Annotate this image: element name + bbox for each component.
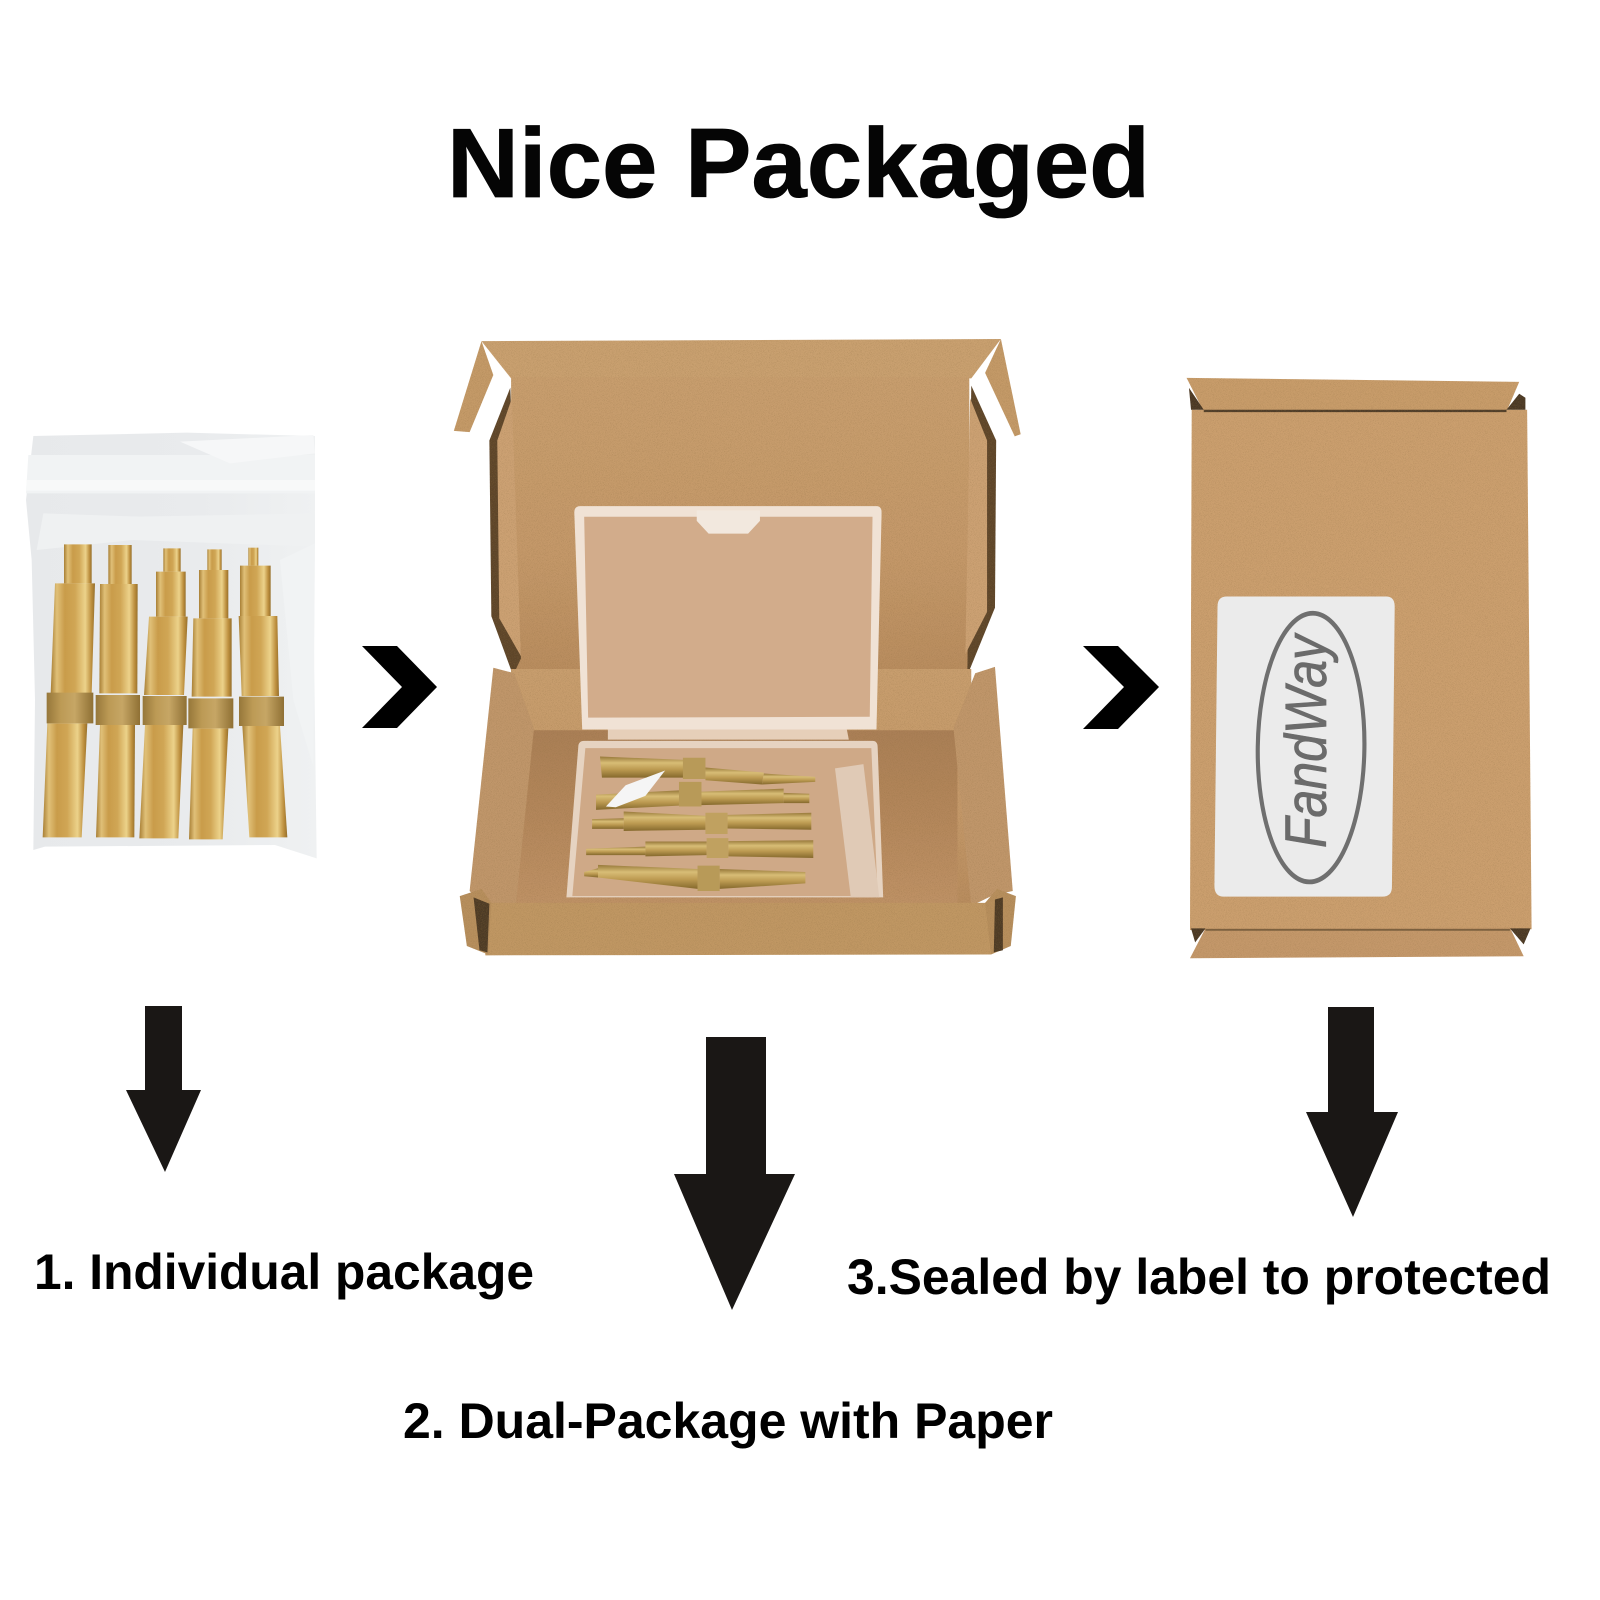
brass pin 3 [139, 548, 188, 838]
panel: individual zip bag with five brass pins [26, 433, 317, 858]
brass pin row 3 [592, 812, 811, 834]
white label sticker [1214, 597, 1395, 897]
plastic wrap glare [606, 770, 665, 807]
caption 2: 2. Dual-Package with Paper [403, 1393, 1053, 1449]
brass pin row 5 [584, 865, 805, 891]
closed kraft box [1187, 378, 1532, 958]
kraft box shell [454, 339, 1021, 955]
panel: open kraft box with plastic case [454, 339, 1021, 955]
caption 3: 3.Sealed by label to protected [847, 1249, 1551, 1305]
plastic case lid [574, 506, 882, 729]
panel: sealed kraft box with label [1187, 378, 1532, 958]
arrow: down to caption 1 [126, 1006, 201, 1172]
brass pin row 2 [596, 782, 809, 810]
logo text: FandWay [1274, 632, 1339, 848]
arrow: bag to open box [362, 646, 437, 728]
brass pin row 4 [586, 838, 813, 858]
arrow: open box to closed box [1083, 646, 1159, 729]
brass pin 1 [43, 544, 95, 837]
brass pin 5 [239, 548, 287, 837]
brass pin 4 [188, 549, 233, 839]
plastic case hinge [608, 729, 849, 740]
brass pin row 1 [600, 757, 815, 784]
title: Nice Packaged [447, 108, 1150, 218]
arrow: down to caption 3 [1306, 1007, 1398, 1217]
caption 1: 1. Individual package [34, 1244, 534, 1300]
arrow: down to caption 2 [674, 1037, 795, 1310]
brass pin 2 [96, 545, 140, 837]
logo oval [1256, 612, 1366, 883]
plastic case base [566, 741, 883, 897]
zip bag [26, 433, 317, 858]
